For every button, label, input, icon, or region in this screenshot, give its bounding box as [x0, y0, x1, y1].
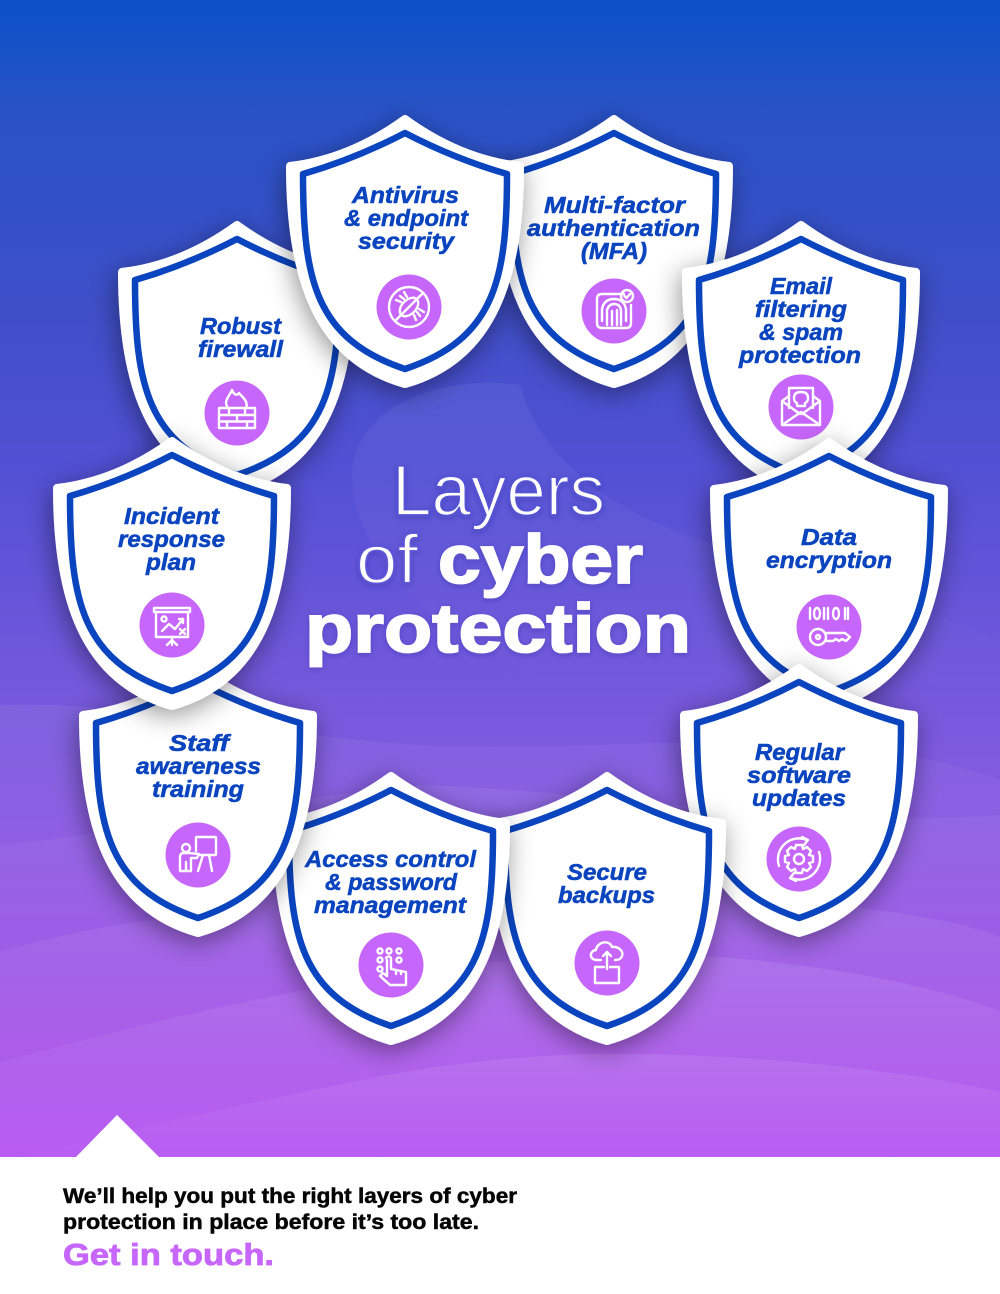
shield shape	[686, 225, 916, 490]
label: software	[747, 762, 851, 788]
label: & endpoint	[344, 205, 469, 231]
icon: spam envelope	[768, 374, 834, 440]
footer text: We’ll help you put the right layers of cyber	[63, 1185, 517, 1208]
label: Email	[770, 273, 833, 299]
label	[766, 524, 892, 573]
title: protection	[305, 590, 691, 667]
label: encryption	[766, 547, 892, 573]
shield shape	[276, 776, 506, 1041]
label: (MFA)	[581, 238, 647, 264]
title: Layers	[392, 452, 605, 531]
label	[344, 182, 469, 254]
label: backups	[558, 882, 655, 908]
icon: trainer at board	[166, 822, 230, 888]
label: updates	[752, 785, 846, 811]
shield: regular software updates	[684, 668, 914, 933]
shield: access control and password management	[276, 776, 506, 1041]
label: Secure	[567, 859, 647, 885]
label: response	[118, 526, 225, 552]
shield: staff awareness training	[83, 668, 313, 933]
label	[747, 739, 851, 811]
title: cyber	[438, 521, 643, 598]
label	[118, 503, 225, 575]
label	[558, 859, 655, 908]
label: plan	[145, 549, 196, 575]
shield shape	[83, 668, 313, 933]
label: firewall	[198, 336, 284, 362]
label	[527, 192, 700, 264]
shield: secure backups	[492, 776, 722, 1041]
shield shape	[290, 119, 520, 384]
label: Antivirus	[351, 182, 459, 208]
label: authentication	[527, 215, 700, 241]
shield shape	[122, 225, 352, 490]
label: & password	[325, 869, 458, 895]
call to action: Get in touch.	[63, 1237, 274, 1272]
icon: bug blocked	[376, 274, 442, 340]
label	[738, 273, 861, 368]
label: training	[152, 776, 244, 802]
shield: antivirus and endpoint security	[290, 119, 520, 384]
title: of	[356, 521, 419, 598]
footer pointer	[75, 1115, 160, 1158]
label	[198, 313, 284, 362]
icon: gear update	[766, 826, 832, 892]
label: awareness	[136, 753, 261, 779]
label: Staff	[169, 730, 232, 756]
shield shape	[57, 441, 287, 706]
footer text: protection in place before it’s too late.	[63, 1211, 479, 1234]
shield: email filtering and spam protection	[686, 225, 916, 490]
label	[304, 846, 477, 918]
label	[136, 730, 261, 802]
label: Multi-factor	[544, 192, 686, 218]
label: Data	[801, 524, 857, 550]
label: management	[314, 892, 467, 918]
title	[305, 452, 691, 667]
shield: multi-factor authentication	[499, 119, 729, 384]
icon: keypad touch	[358, 932, 424, 998]
shield: data encryption	[714, 442, 944, 707]
label: protection	[738, 342, 861, 368]
icon: firewall	[204, 380, 270, 446]
shield shape	[684, 668, 914, 933]
label: Regular	[755, 739, 845, 765]
label: filtering	[755, 296, 847, 322]
label: & spam	[759, 319, 843, 345]
icon: fingerprint	[582, 278, 646, 344]
icon: binary key	[796, 594, 862, 660]
shield: incident response plan	[57, 441, 287, 706]
icon: cloud backup	[574, 930, 640, 996]
shield shape	[714, 442, 944, 707]
label: Access control	[304, 846, 477, 872]
shield shape	[499, 119, 729, 384]
footer panel	[0, 1115, 1000, 1294]
shield: robust firewall	[122, 225, 352, 490]
icon: presentation plan	[140, 592, 204, 658]
shield shape	[492, 776, 722, 1041]
label: Incident	[124, 503, 220, 529]
footer text	[63, 1185, 517, 1272]
label: security	[358, 228, 455, 254]
label: Robust	[200, 313, 282, 339]
